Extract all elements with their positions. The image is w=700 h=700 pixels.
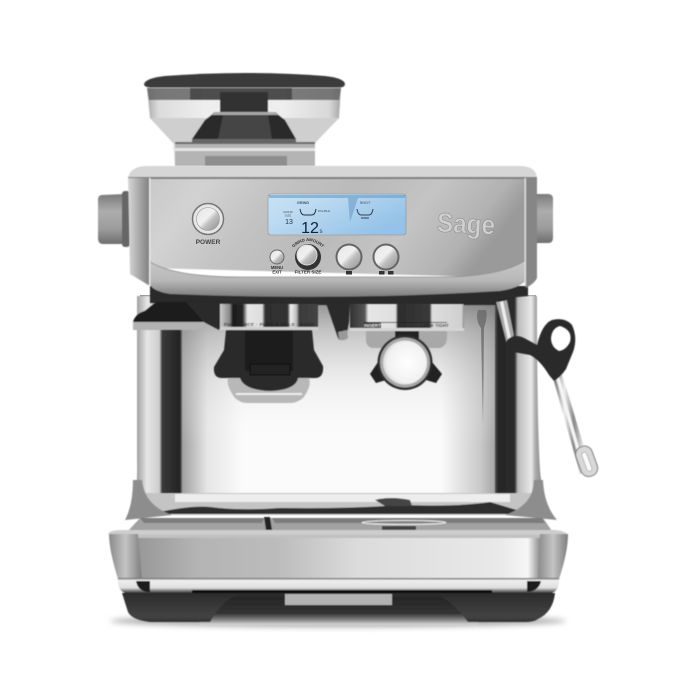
grind dial [292,238,324,274]
grill slot detail [362,520,446,524]
LCD display [268,194,406,237]
shot cup icon [357,209,373,218]
brew group: INSERT [364,323,381,328]
LCD display: 13 [285,219,293,226]
left leg curves [125,480,172,520]
cradle [214,330,323,378]
silver block [285,594,392,605]
right column [495,296,547,516]
tray right corner [538,534,568,579]
brew group [326,303,464,390]
single shot button [336,244,362,274]
rubber grip with loop [506,319,575,381]
left side panel [128,178,150,286]
filter size label: FILTER SIZE [295,270,321,274]
floor shadow [110,615,566,627]
under-base shadow [200,592,478,625]
portafilter ears [370,362,386,383]
top strip [128,166,537,178]
dark wavy reflection [150,502,530,514]
grill plate [128,518,552,531]
double label: DOUBLE [318,209,330,213]
menu exit button: MENU [271,265,283,270]
bean hopper [144,73,345,166]
left dosing funnel [133,302,204,322]
hopper glass body [147,88,341,166]
hopper centre stem [220,92,268,116]
grind size readout: GRIND [283,210,294,214]
steam wand [496,300,600,479]
tray left corner [109,534,142,579]
grind dial: GRIND AMOUNT [292,238,324,247]
double shot button [374,244,398,274]
insert lock tight scale [364,322,381,328]
silver collar [220,304,318,330]
inner reflection band [132,493,548,515]
bottom of well and drip tray [108,480,568,625]
menu exit button: EXIT [272,270,282,274]
chin crease [150,260,526,277]
grind label: GRIND [297,201,309,205]
left column [132,296,182,515]
brushed front panel [150,179,526,278]
wand lower pipe [553,374,591,474]
portafilter ring [378,335,432,390]
left steam knob [98,191,130,247]
LCD display: s [320,229,322,235]
menu exit button [270,250,284,274]
shot label: SHOT [360,201,371,205]
right side panel [526,178,537,288]
machine head [128,166,537,305]
wand tip [573,444,600,479]
reflection streak [477,310,487,424]
grind cup icon [300,209,316,215]
power label: POWER [196,239,221,246]
Sage logo: Sage [436,208,496,240]
grinder outlet cradle [133,302,323,403]
chrome strip [118,578,559,593]
chute [186,302,232,330]
dark underside [150,286,528,305]
recessed well background [140,295,536,510]
chin [150,260,526,297]
machine body well [132,295,547,516]
right steam knob [528,192,553,246]
wand upper pipe [496,300,514,345]
hopper cone [192,113,296,139]
hopper lid [144,73,345,88]
brew group: LOCK TIGHT [421,323,449,328]
black feet [122,593,555,622]
lower group collar [366,331,447,348]
drip tray front [138,538,540,579]
LCD display: SIZE [285,214,291,218]
tray top lip [108,530,568,536]
collar text: PUSH ONCE · PUSH & HOLD · PUSH [224,322,314,327]
seconds readout: 12 [301,220,319,237]
power button [192,204,224,246]
portafilter basket [228,378,310,403]
group collar [350,304,464,330]
group steam pipe [326,303,350,340]
group reflection [395,331,419,339]
